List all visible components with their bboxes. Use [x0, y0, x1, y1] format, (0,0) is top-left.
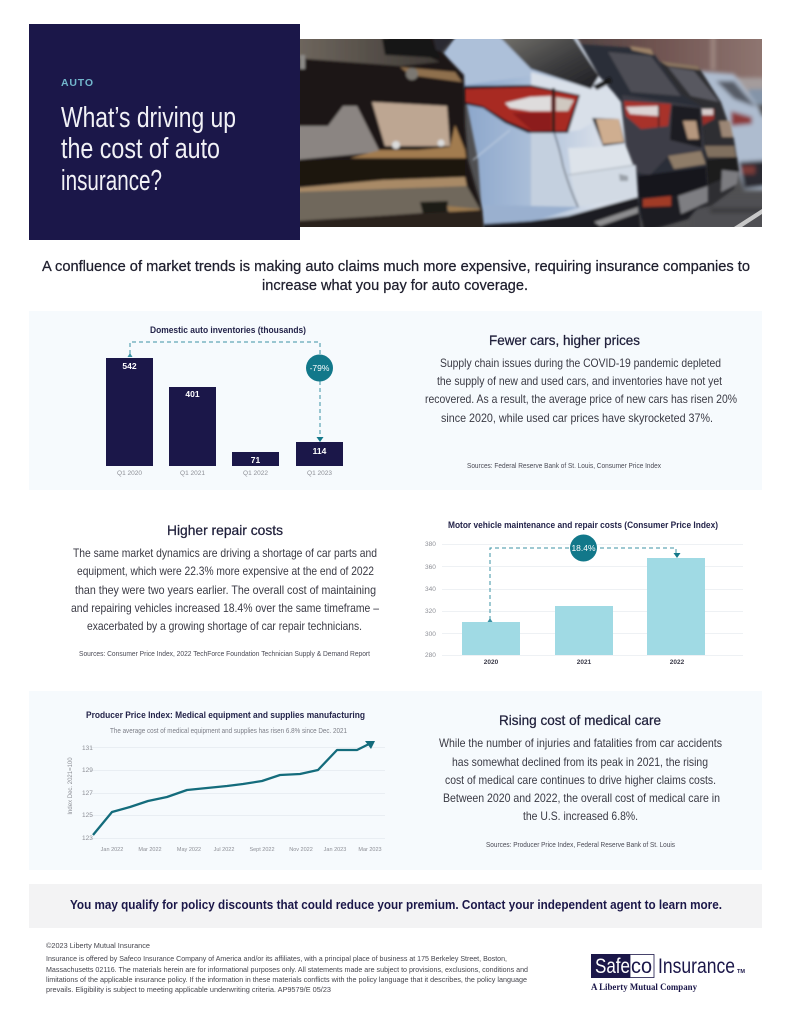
- fourth car: [659, 61, 739, 210]
- bar chart: domestic auto inventories: Q1 2023: [307, 470, 332, 477]
- callout: -79%: [306, 354, 333, 382]
- photo: row of parked cars: [295, 34, 770, 232]
- eyebrow: AUTO: AUTO: [61, 77, 93, 89]
- bar chart: maintenance and repair costs: 300: [425, 631, 436, 638]
- panel: higher repair costs: [71, 520, 743, 666]
- callout: 18.4%: [570, 534, 597, 562]
- line chart: producer price index: [68, 710, 385, 853]
- title: [61, 102, 236, 197]
- bar chart: domestic auto inventories: 114: [313, 446, 327, 456]
- callout: 18.4%: 18.4%: [571, 543, 596, 553]
- call to action band: You may qualify for policy discounts that could reduce your premium. Contact your independent agent to learn more.: [70, 898, 722, 912]
- line chart: producer price index: Nov 2022: [289, 847, 313, 853]
- sources: repair costs: Sources: Consumer Price Index, 2022 TechForce Foundation Technician Supply & Demand Report: [79, 649, 371, 658]
- logo: Safeco Insurance: Insurance: [658, 955, 735, 978]
- intro statement: A confluence of market trends is making auto claims much more expensive, requiring insurance companies to: [42, 259, 750, 275]
- text block: repair costs: and repairing vehicles increased 18.4% over the same timeframe –: [71, 601, 379, 615]
- text block: medical care: [439, 736, 722, 823]
- line chart: producer price index: 125: [82, 812, 93, 819]
- text block: medical care: has somewhat declined from its peak in 2021, the rising: [452, 755, 708, 769]
- third car: [578, 44, 708, 232]
- line chart: producer price index: 127: [82, 790, 93, 797]
- footer legal text: prevails. Eligibility is subject to meeting applicable underwriting criteria. AP9579/E 05/23: [46, 985, 331, 994]
- logo: Safeco Insurance: A Liberty Mutual Company: [591, 982, 697, 992]
- logo: Safeco Insurance: co: [631, 955, 652, 978]
- line chart: producer price index: Jul 2022: [214, 847, 234, 853]
- title: insurance?: [61, 165, 162, 197]
- bar chart: maintenance and repair costs: 360: [425, 564, 436, 571]
- bar chart: maintenance and repair costs: 2020: [484, 659, 499, 666]
- logo: Safeco Insurance: [591, 954, 745, 992]
- dark car in foreground: [295, 34, 484, 232]
- heading: fewer cars: Fewer cars, higher prices: [489, 332, 640, 348]
- intro statement: increase what you pay for auto coverage.: [262, 278, 528, 294]
- text block: repair costs: [71, 546, 379, 633]
- bar chart: domestic auto inventories: 401: [185, 389, 200, 399]
- white car: [443, 34, 641, 232]
- footer legal text: Massachusetts 02116. The materials herein are for informational purposes only. All statements made are subject to provisions, exclusions, conditions and: [46, 965, 528, 974]
- sources: fewer cars: Sources: Federal Reserve Bank of St. Louis, Consumer Price Index: [467, 461, 661, 470]
- title: What’s driving up: [61, 102, 236, 134]
- panel: rising cost of medical care: [29, 691, 762, 870]
- line chart: producer price index: 123: [82, 835, 93, 842]
- text block: fewer cars: since 2020, while used car prices have skyrocketed 37%.: [441, 411, 713, 425]
- callout: -79%: -79%: [310, 363, 330, 373]
- footer legal text: Insurance is offered by Safeco Insurance Company of America and/or its affiliates, with a principal place of business at 175 Berkeley Street, Boston,: [46, 954, 507, 963]
- line chart: producer price index: 129: [82, 767, 93, 774]
- line chart: producer price index: The average cost of medical equipment and supplies has risen 6.8% since Dec. 2021: [110, 726, 347, 735]
- text block: fewer cars: Supply chain issues during the COVID-19 pandemic depleted: [440, 356, 721, 370]
- sources: medical care: Sources: Producer Price Index, Federal Reserve Bank of St. Louis: [486, 840, 675, 849]
- text block: medical care: Between 2020 and 2022, the overall cost of medical care in: [443, 791, 720, 805]
- footer legal text: [46, 941, 528, 994]
- text block: medical care: the U.S. increased 6.8%.: [523, 809, 638, 823]
- bar chart: maintenance and repair costs: 2021: [577, 659, 592, 666]
- panel: fewer cars: [29, 311, 762, 490]
- text block: fewer cars: recovered. As a result, the average price of new cars has risen 20%: [425, 392, 737, 406]
- text block: repair costs: exacerbated by a growing shortage of car repair technicians.: [87, 619, 362, 633]
- line chart: producer price index: Producer Price Index: Medical equipment and supplies manufacturing: [86, 710, 365, 720]
- heading: medical care: Rising cost of medical care: [499, 712, 661, 728]
- bar chart: maintenance and repair costs: 2022: [670, 659, 685, 666]
- bar chart: domestic auto inventories: 542: [122, 361, 137, 371]
- bar chart: maintenance and repair costs: Motor vehicle maintenance and repair costs (Consumer Price Index): [448, 520, 718, 530]
- text block: repair costs: than they were two years earlier. The overall cost of maintaining: [75, 583, 376, 597]
- bar chart: maintenance and repair costs: [425, 520, 743, 666]
- bar chart: domestic auto inventories: Q1 2021: [180, 470, 205, 477]
- logo: Safeco Insurance: TM: [737, 969, 745, 975]
- logo: Safeco Insurance: Safe: [595, 955, 630, 978]
- far car: [698, 71, 770, 190]
- text block: medical care: cost of medical care continues to drive higher claims costs.: [445, 773, 716, 787]
- bar chart: maintenance and repair costs: 340: [425, 586, 436, 593]
- text block: medical care: While the number of injuries and fatalities from car accidents: [439, 736, 722, 750]
- bar chart: domestic auto inventories: [106, 325, 343, 477]
- bar chart: maintenance and repair costs: 320: [425, 608, 436, 615]
- call to action band: [29, 884, 762, 928]
- bar chart: domestic auto inventories: Domestic auto inventories (thousands): [150, 325, 306, 335]
- line chart: producer price index: Sept 2022: [249, 847, 275, 853]
- text block: fewer cars: the supply of new and used cars, and inventories have not yet: [437, 374, 723, 388]
- line chart: producer price index: May 2022: [177, 847, 201, 853]
- line chart: producer price index: Jan 2022: [101, 847, 123, 853]
- text block: fewer cars: [425, 356, 737, 425]
- title panel: [29, 24, 300, 240]
- bar chart: domestic auto inventories: Q1 2022: [243, 470, 268, 477]
- line chart: producer price index: Jan 2023: [324, 847, 346, 853]
- heading: repair costs: Higher repair costs: [167, 522, 283, 538]
- bar chart: maintenance and repair costs: 380: [425, 541, 436, 548]
- text block: repair costs: The same market dynamics are driving a shortage of car parts and: [73, 546, 377, 560]
- intro statement: [42, 259, 750, 294]
- line chart: producer price index: 131: [82, 745, 93, 752]
- text block: repair costs: equipment, which were 22.3% more expensive at the end of 2022: [77, 564, 374, 578]
- bar chart: maintenance and repair costs: 280: [425, 652, 436, 659]
- footer legal text: ©2023 Liberty Mutual Insurance: [46, 941, 150, 950]
- title: the cost of auto: [61, 133, 220, 165]
- line chart: producer price index: Index Dec. 2021=100: [68, 757, 74, 815]
- line chart: producer price index: Mar 2022: [138, 847, 162, 853]
- footer legal text: limitations of the applicable insurance policy. If the information in these materials conflicts with the policy language that it describes, the policy language: [46, 975, 527, 984]
- bar chart: domestic auto inventories: 71: [251, 455, 260, 465]
- line chart: producer price index: Mar 2023: [358, 847, 382, 853]
- bar chart: domestic auto inventories: Q1 2020: [117, 470, 142, 477]
